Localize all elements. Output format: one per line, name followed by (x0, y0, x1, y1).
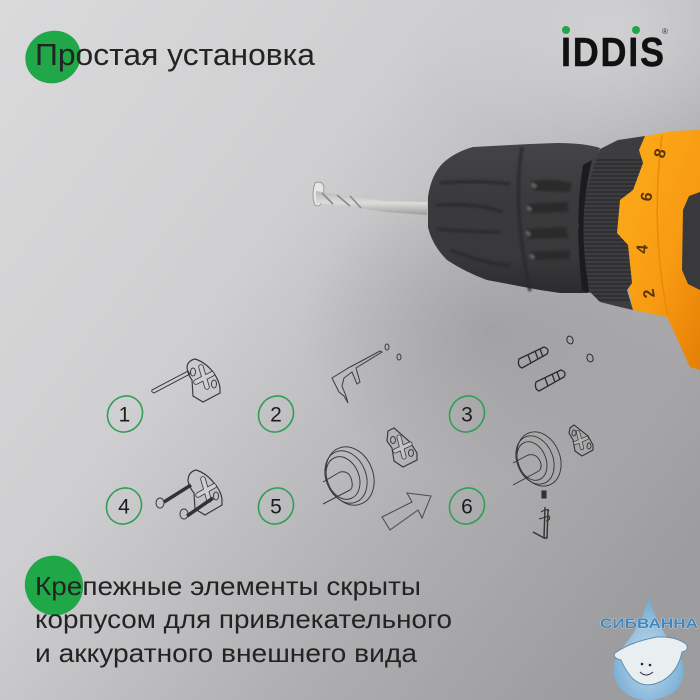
step 1 number (100, 389, 150, 439)
step 4 number: 4 (118, 496, 130, 518)
step 6: rosette on pipe (509, 425, 569, 493)
step 2: drill sketch (332, 344, 401, 403)
logo: IDDIS: IDDIS (561, 30, 664, 75)
description text: корпусом для привлекательного (35, 604, 452, 634)
speed scale numbers: 6 (638, 191, 657, 203)
step 3: wall plugs (518, 335, 594, 391)
title: Простая установка (35, 38, 315, 72)
watermark bath (614, 637, 687, 685)
chuck collar (583, 136, 645, 310)
arrow (382, 493, 431, 530)
drill body (610, 130, 700, 370)
step 1: pin and bracket (152, 359, 220, 402)
chuck (428, 143, 600, 293)
speed scale numbers: 4 (634, 244, 652, 254)
drill grip (682, 192, 700, 290)
step 5 number: 5 (270, 496, 282, 518)
description text: Крепежные элементы скрыты (35, 571, 421, 601)
step 3 number: 3 (461, 404, 473, 426)
step 6 number (442, 481, 492, 531)
step 1 number: 1 (119, 404, 130, 426)
step 6: grub screw and hex key (533, 491, 550, 538)
step 3 number (442, 389, 492, 439)
step 4 number (99, 481, 149, 531)
logo: IDDIS: ® (662, 27, 668, 36)
description text: и аккуратного внешнего вида (35, 638, 418, 668)
green accent: title (17, 22, 89, 92)
speed scale numbers (634, 147, 670, 299)
description text (35, 571, 452, 668)
speed scale numbers: 2 (641, 287, 659, 299)
speed scale numbers: 8 (651, 147, 670, 160)
step 5 number (251, 481, 301, 531)
watermark: Sibvanna (600, 597, 698, 700)
step 4: bracket with screws (156, 470, 222, 519)
step 2 number: 2 (270, 404, 282, 426)
step 6: bracket (569, 425, 593, 456)
step 2 number (251, 389, 301, 439)
step 6 number: 6 (461, 496, 473, 518)
power drill (428, 130, 700, 370)
green accent: description (15, 546, 93, 625)
drill bit and hole (313, 182, 427, 215)
watermark text: СИБВАННА (600, 615, 698, 631)
step 5: bracket (387, 428, 417, 467)
step 5: rosette on pipe (317, 440, 383, 512)
